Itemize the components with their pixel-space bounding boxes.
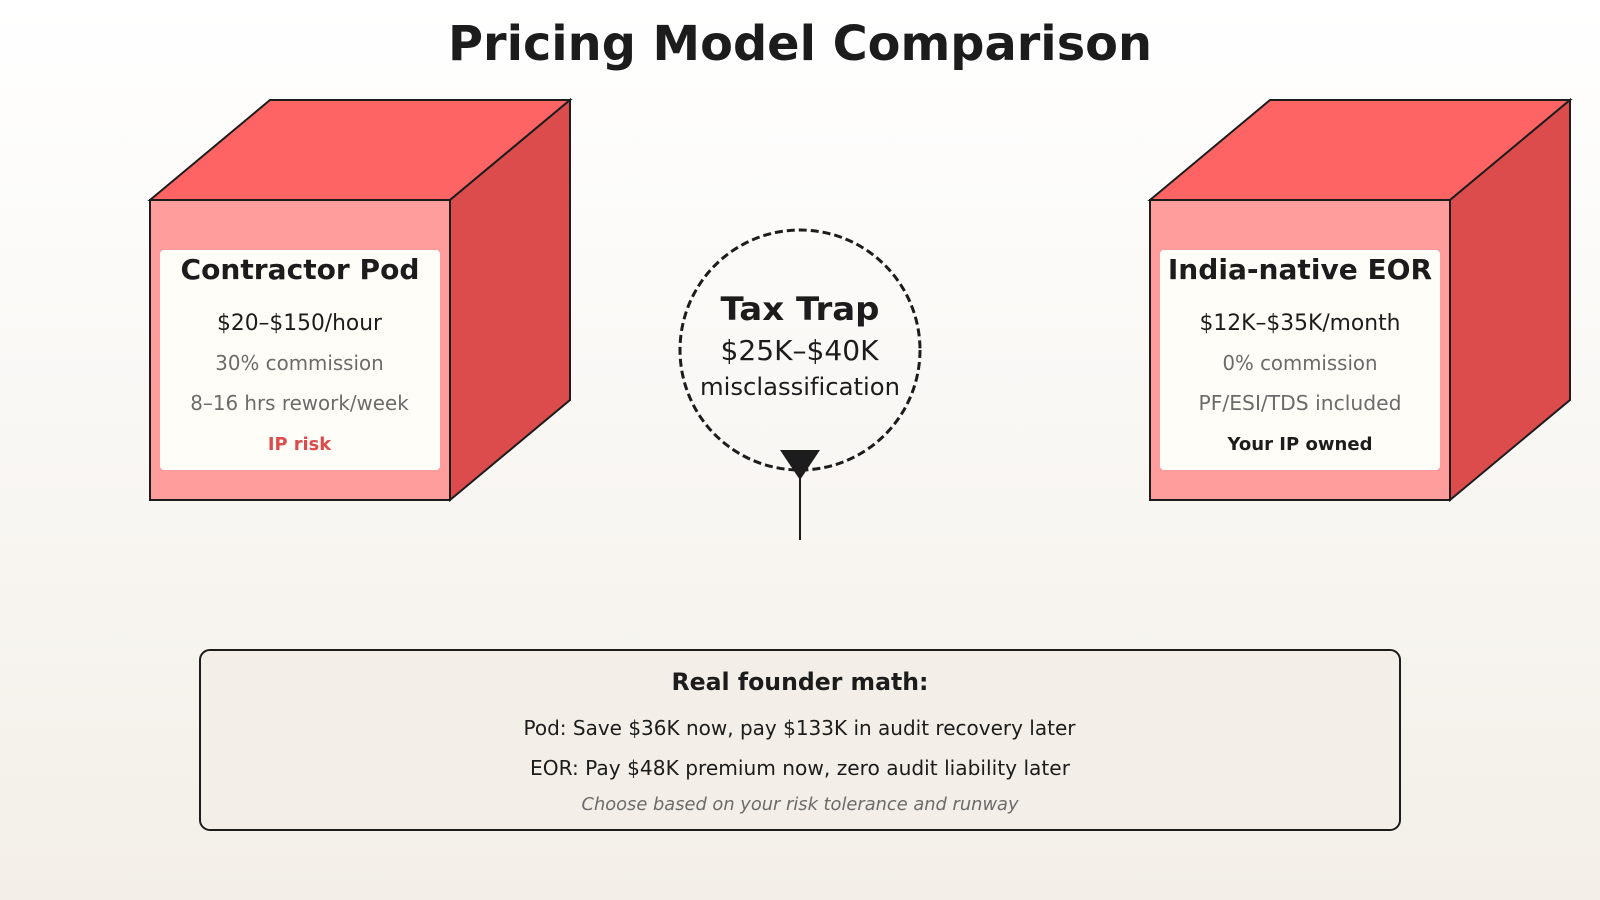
cube side face: [450, 100, 570, 500]
panel: real founder math: EOR: Pay $48K premium now, zero audit liability later: [530, 756, 1071, 780]
callout: tax trap circle: misclassification: [700, 373, 900, 401]
cube top face: [150, 100, 570, 200]
panel: India-native EOR cube: [1150, 100, 1570, 500]
panel: real founder math: [200, 650, 1400, 830]
arrow: pointing down into circle: [780, 450, 820, 540]
Contractor Pod details card: Contractor Pod: [180, 253, 420, 286]
India-native EOR details card: PF/ESI/TDS included: [1198, 391, 1402, 415]
Contractor Pod details card: $20–$150/hour: [217, 311, 383, 336]
panel: Contractor Pod cube: [150, 100, 570, 500]
India-native EOR details card: [1160, 250, 1440, 470]
cube front face: [1150, 200, 1450, 500]
callout: tax trap circle: $25K–$40K: [720, 334, 879, 367]
callout: tax trap circle: Tax Trap: [720, 290, 880, 328]
cube side face: [1450, 100, 1570, 500]
Contractor Pod details card: 30% commission: [215, 351, 384, 375]
India-native EOR details card: 0% commission: [1222, 351, 1378, 375]
Contractor Pod details card: IP risk: [268, 434, 332, 455]
panel: real founder math: Real founder math:: [672, 668, 928, 696]
Contractor Pod details card: [160, 250, 440, 470]
cube top face: [1150, 100, 1570, 200]
Contractor Pod details card: 8–16 hrs rework/week: [190, 391, 409, 415]
India-native EOR details card: Your IP owned: [1226, 434, 1372, 455]
title: Pricing Model Comparison: [448, 16, 1152, 72]
cube front face: [150, 200, 450, 500]
India-native EOR details card: India-native EOR: [1168, 253, 1432, 286]
callout: tax trap circle: [680, 230, 920, 470]
panel: real founder math: Choose based on your risk tolerance and runway: [582, 794, 1019, 815]
India-native EOR details card: $12K–$35K/month: [1200, 311, 1400, 336]
panel: real founder math: Pod: Save $36K now, pay $133K in audit recovery later: [524, 716, 1076, 740]
